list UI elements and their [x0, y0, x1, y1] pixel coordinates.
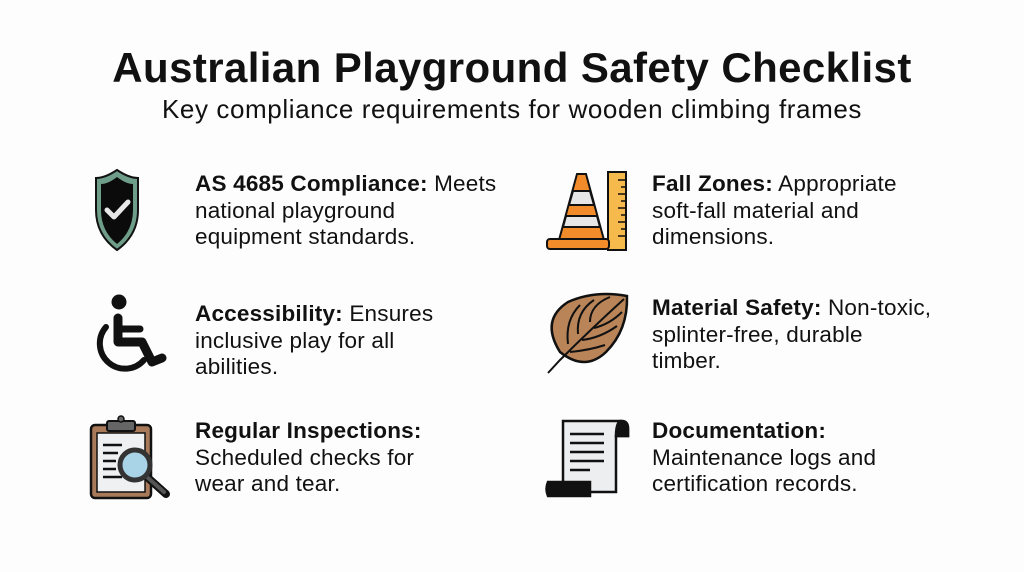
text: inspections: wear and tear.: [195, 471, 340, 496]
text: inspections: Scheduled checks for: [195, 444, 414, 470]
icon: scroll document: [546, 421, 628, 496]
text: fall zones: Fall Zones: Appropriate: [652, 171, 897, 196]
text: documentation: [652, 418, 876, 496]
text: material: Material Safety: Non-toxic,: [652, 295, 931, 320]
text: material: splinter-free, durable: [652, 322, 863, 346]
icon: leaf: [548, 294, 627, 373]
text: AS 4685: equipment standards.: [195, 224, 415, 249]
icon: cone and ruler: [547, 172, 626, 250]
text: accessibility: inclusive play for all: [195, 328, 394, 352]
text: fall zones: soft-fall material and: [652, 198, 859, 222]
text: inspections: Regular Inspections:: [195, 418, 422, 443]
icon: clipboard with magnifier: [91, 416, 166, 498]
text: material: [652, 295, 931, 373]
icon: shield: [96, 170, 138, 250]
text: fall zones: dimensions.: [652, 224, 774, 249]
text: AS 4685: [195, 171, 496, 249]
text: documentation: Maintenance logs and: [652, 444, 876, 470]
text: fall zones: [652, 171, 897, 249]
subtitle: Key compliance requirements for wooden climbing frames: [162, 94, 862, 124]
text: inspections: [195, 418, 422, 496]
title: Australian Playground Safety Checklist: [112, 44, 912, 91]
text: accessibility: Accessibility: Ensures: [195, 301, 433, 326]
text: material: timber.: [652, 348, 721, 373]
text: accessibility: abilities.: [195, 354, 278, 379]
text: AS 4685: AS 4685 Compliance: Meets: [195, 171, 496, 196]
text: documentation: Documentation:: [652, 418, 826, 443]
text: documentation: certification records.: [652, 471, 858, 496]
icon: wheelchair: [100, 294, 162, 369]
text: AS 4685: national playground: [195, 198, 395, 222]
text: accessibility: [195, 301, 433, 379]
